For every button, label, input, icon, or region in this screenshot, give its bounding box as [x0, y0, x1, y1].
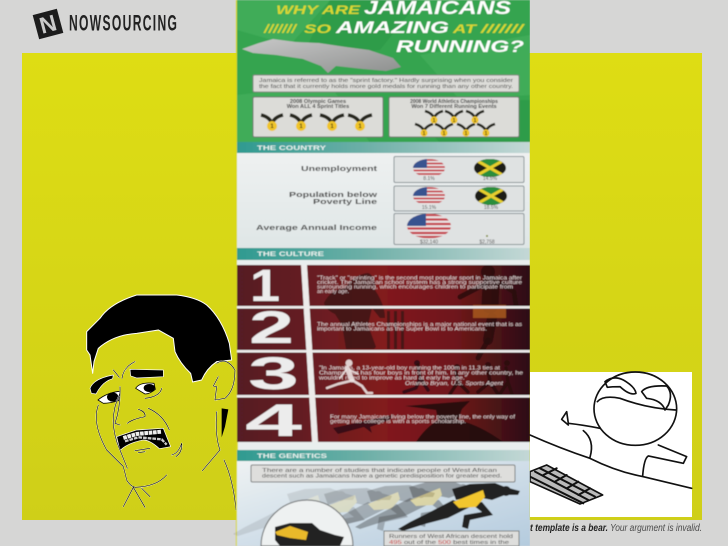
intro text box: the fact that it currently holds more gold medals for running than any other country. [259, 84, 513, 90]
panel: country statistics [237, 153, 530, 248]
map of Africa in circle [261, 500, 353, 546]
section bar: The Genetics: THE GENETICS [257, 454, 327, 460]
panel: 2008 Olympic Games [253, 97, 383, 137]
lead runner [398, 483, 520, 531]
panel: genetics: There are a number of studies that indicate people of West African [262, 468, 497, 474]
flags row 3: $2,758 [479, 240, 495, 246]
lane text: "In Jamaica, a 13-year-old boy running the 100m in 11.3 ties at [319, 366, 501, 372]
title: /////// [479, 22, 526, 36]
section bar: The Culture: THE CULTURE [257, 252, 324, 258]
lane numbers: 4 [245, 395, 302, 446]
row labels: Population below [289, 192, 378, 199]
section bar: The Culture [237, 248, 530, 260]
section bar: The Country: THE COUNTRY [257, 146, 326, 152]
section bar: The Genetics [237, 450, 530, 461]
logo: Nowsourcing: N [37, 9, 59, 39]
meme: laughing stick figure [530, 372, 692, 517]
medals group: 1 [465, 131, 468, 137]
intro text box [253, 75, 519, 92]
lane text: wouldn't need to improve as hard at early he age." [319, 376, 467, 382]
lane text: an early age. [317, 289, 349, 295]
caption: meme: t template is a bear. Your argument is invalid. [530, 523, 702, 534]
medals group [415, 111, 495, 137]
medals group: 1 [453, 118, 456, 124]
lane text: For many Jamaicans living below the poverty line, the only way of [330, 414, 516, 420]
panel: genetics [233, 461, 530, 546]
title: /////// [263, 22, 298, 36]
flags row 2: 18.5% [484, 205, 499, 211]
title: SO [304, 22, 332, 36]
intro text box: Jamaica is referred to as the "sprint factory." Hardly surprising when you consider [259, 78, 513, 84]
flags row 2: 15.1% [422, 205, 437, 211]
medals group: 1 [423, 131, 426, 137]
medals row [261, 115, 372, 131]
logo: Nowsourcing: NOWSOURCING [69, 11, 178, 35]
lane numbers [245, 260, 302, 446]
title: WHY ARE [276, 3, 361, 17]
flags row 1: 8.1% [423, 176, 435, 182]
panel: culture running track [237, 260, 530, 446]
silhouettes: athletes [324, 265, 516, 442]
panel: 2008 World Athletics Championships [389, 97, 519, 137]
comparison boxes [394, 156, 524, 244]
flags row 1: 14.5% [483, 176, 498, 182]
medals group: 1 [443, 131, 446, 137]
title [263, 0, 526, 56]
medals row: 1 [270, 124, 274, 130]
title: RUNNING? [396, 37, 525, 56]
track lane lines [237, 265, 530, 442]
meme face: left [87, 295, 236, 510]
panel: 2008 Olympic Games: 2008 Olympic Games [290, 99, 346, 105]
lane text: surrounding running, which encourages children to participate from [317, 284, 513, 290]
flags row 3: $32,140 [420, 240, 438, 246]
medals group: 1 [485, 131, 488, 137]
title: AT [451, 22, 479, 36]
yellow slide panel [22, 53, 702, 520]
lane text: Orlando Bryan, U.S. Sports Agent [405, 381, 504, 387]
row labels: Poverty Line [313, 199, 377, 206]
medals row: 1 [358, 124, 362, 130]
section bar: The Country [237, 142, 530, 153]
lane text [317, 276, 523, 425]
lane text: Champs, but has four boys in front of him. In any other country, he [319, 370, 523, 376]
fact box [384, 531, 519, 546]
lane text: "Track" or "sprinting" is the second most popular sport in Jamaica after [317, 276, 522, 282]
medals group: 1 [433, 118, 436, 124]
map of Jamaica [242, 39, 401, 73]
row labels: Average Annual Income [256, 225, 377, 232]
lane text: getting into college is with a sports scholarship. [330, 419, 466, 425]
flags row 3 [407, 213, 495, 246]
lane numbers: 2 [249, 302, 294, 353]
medals row: 1 [299, 124, 303, 130]
panel: 2008 Olympic Games: Won ALL 4 Sprint Titles [287, 104, 349, 110]
lane numbers: 1 [250, 260, 280, 311]
lane numbers: 3 [248, 348, 299, 399]
flags row 1 [413, 159, 506, 182]
intro box [251, 465, 515, 482]
medals row: 1 [330, 124, 334, 130]
fact box: Runners of West African descent hold [389, 534, 513, 540]
flags row 2 [413, 187, 507, 211]
panel: 2008 World Athletics Championships: 2008 World Athletics Championships [410, 99, 498, 105]
medals group: 1 [474, 118, 477, 124]
fact box: 495 out of the 500 best times in the [389, 540, 509, 546]
lane text: The annual Athletes Championships is a major national event that is as [317, 322, 523, 328]
row labels: Unemployment [301, 166, 378, 173]
lane text: cricket. The Jamaican school system has a strong supportive culture [317, 280, 522, 286]
row labels [256, 166, 378, 232]
panel: 2008 World Athletics Championships: Won 7 Different Running Events [411, 104, 497, 110]
logo: Nowsourcing [33, 9, 178, 39]
ghost runners [233, 481, 477, 536]
title: AMAZING [335, 18, 449, 37]
panel: genetics: descent such as Jamaicans have a genetic predisposition for greater speed. [262, 474, 502, 480]
header: green background [237, 0, 530, 143]
infographic [233, 0, 530, 546]
lane text: important to Jamaicans as the Super Bowl is to Americans. [317, 326, 487, 332]
